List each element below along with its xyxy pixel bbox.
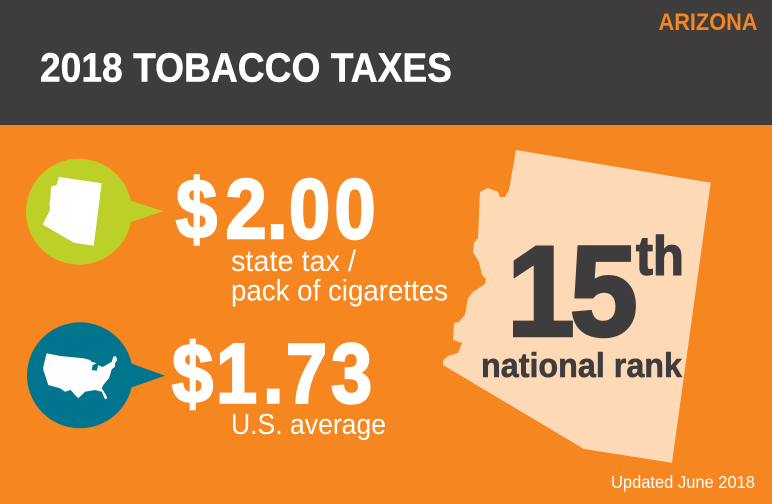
icon: United States speech bubble: [27, 322, 165, 428]
state label: ARIZONA: [658, 9, 758, 36]
state tax caption: [231, 245, 448, 308]
icon: Arizona speech bubble: [26, 159, 164, 265]
header band: [0, 0, 772, 125]
panel: U.S. average: [27, 322, 386, 441]
state tax caption: pack of cigarettes: [231, 274, 448, 308]
U.S. average caption: U.S. average: [231, 409, 386, 441]
Arizona state shape: [443, 150, 711, 463]
rank suffix: th: [636, 224, 684, 286]
update note: Updated June 2018: [611, 472, 755, 492]
U.S. average amount: $1.73: [172, 326, 372, 421]
title: 2018 TOBACCO TAXES: [40, 44, 452, 90]
rank number: 15: [507, 221, 638, 363]
state tax amount: $2.00: [176, 162, 376, 256]
panel: state tax: [26, 159, 448, 308]
panel: national rank: [443, 150, 711, 463]
rank label: national rank: [481, 347, 682, 385]
state tax caption: state tax /: [231, 245, 357, 278]
